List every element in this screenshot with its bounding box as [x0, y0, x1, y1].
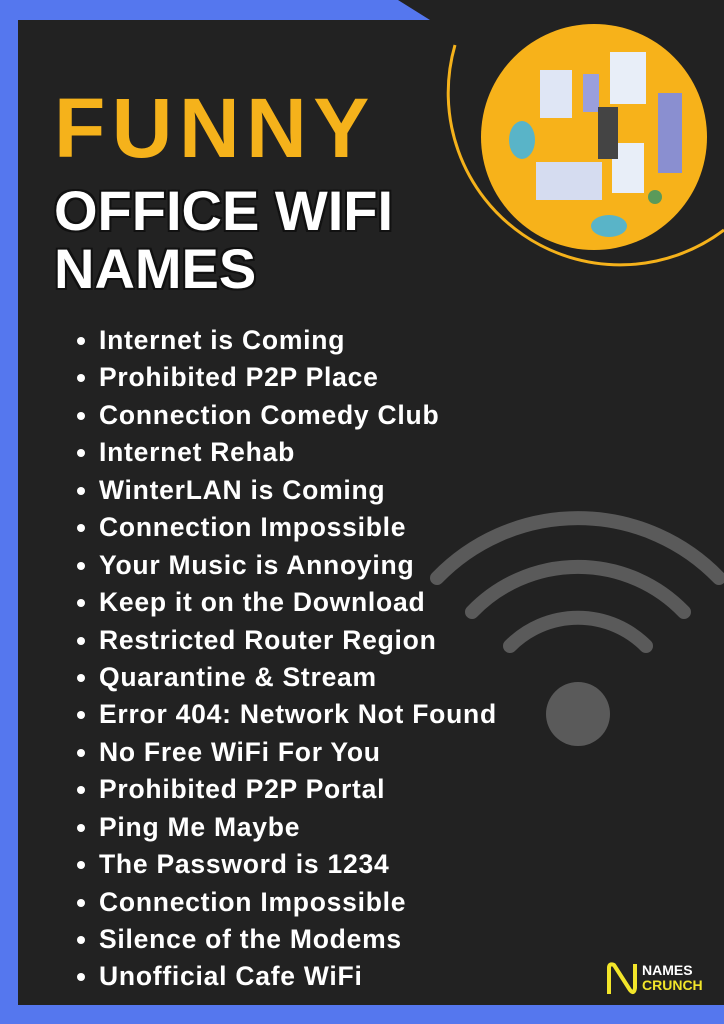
list of wifi names: Quarantine & Stream: [99, 662, 377, 692]
icon: office illustration in circle: [446, 24, 724, 266]
icon: wifi symbol: [430, 511, 724, 746]
list of wifi names: Your Music is Annoying: [99, 550, 414, 580]
logo: NamesCrunch: CRUNCH: [642, 977, 703, 993]
list of wifi names: Internet Rehab: [99, 437, 295, 467]
list of wifi names: The Password is 1234: [99, 849, 389, 879]
list of wifi names: WinterLAN is Coming: [99, 475, 385, 505]
list of wifi names: Internet is Coming: [99, 325, 345, 355]
list of wifi names: Silence of the Modems: [99, 924, 402, 954]
list of wifi names: Prohibited P2P Place: [99, 362, 379, 392]
list of wifi names: Prohibited P2P Portal: [99, 774, 385, 804]
list of wifi names: Keep it on the Download: [99, 587, 425, 617]
logo: NamesCrunch: NAMES: [642, 962, 693, 978]
title: FUNNY: FUNNY: [54, 81, 376, 175]
list of wifi names: Error 404: Network Not Found: [99, 699, 497, 729]
list of wifi names: No Free WiFi For You: [99, 737, 381, 767]
list of wifi names: Connection Comedy Club: [99, 400, 439, 430]
list of wifi names: [77, 325, 497, 991]
list of wifi names: Connection Impossible: [99, 887, 406, 917]
list of wifi names: Connection Impossible: [99, 512, 406, 542]
list of wifi names: Ping Me Maybe: [99, 812, 300, 842]
list of wifi names: Restricted Router Region: [99, 624, 437, 654]
title: OFFICE WIFI NAMES: [54, 179, 393, 300]
title: OFFICE WIFI NAMES: NAMES: [54, 237, 256, 300]
logo: NamesCrunch: [607, 962, 703, 994]
list of wifi names: Unofficial Cafe WiFi: [99, 961, 363, 991]
title: OFFICE WIFI NAMES: OFFICE WIFI: [54, 179, 393, 242]
